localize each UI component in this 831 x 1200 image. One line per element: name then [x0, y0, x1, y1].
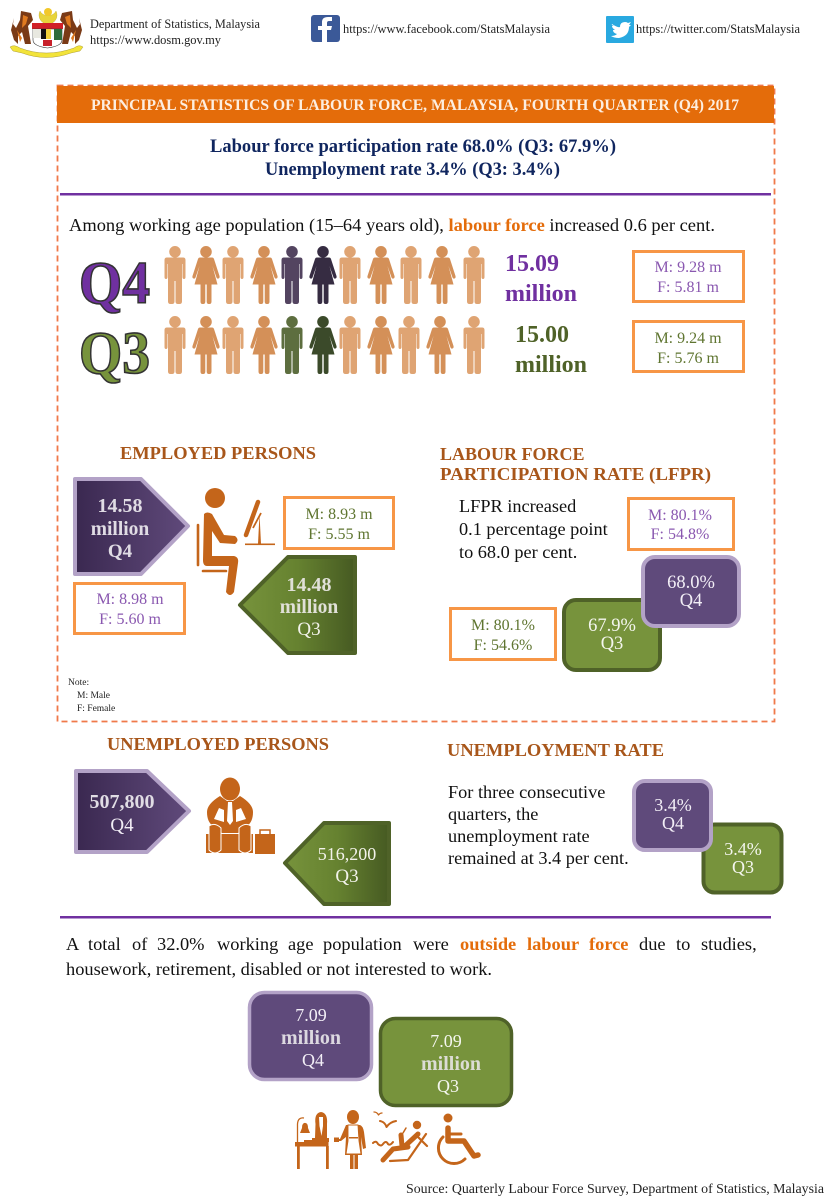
- arrow: employed Q4: 14.58: [98, 495, 142, 517]
- text: outside labour force: A: [66, 934, 80, 954]
- note: [68, 678, 115, 714]
- title banner: [57, 86, 774, 123]
- panel: main dashed frame: [58, 86, 774, 722]
- arrow: employed Q4: million: [91, 519, 149, 540]
- stat: Q3 labour force: million: [515, 352, 587, 378]
- arrow: employed Q3: million: [280, 597, 338, 618]
- text: LFPR statement: LFPR increased: [459, 496, 576, 516]
- header: department text: Department of Statistics, Malaysia: [90, 17, 260, 31]
- text: unemployment statement: [448, 782, 629, 868]
- icon: person at desk: [198, 488, 275, 595]
- badge: outside labour force Q3: 7.09: [430, 1031, 462, 1051]
- icon: wheelchair: [438, 1114, 478, 1164]
- stat: Q4 labour force: million: [505, 281, 577, 307]
- badge: LFPR Q3: Q3: [601, 634, 623, 654]
- text: outside labour force: force: [589, 934, 628, 954]
- callout: LFPR Q4 split: [628, 498, 734, 550]
- text: outside labour force: labour: [527, 934, 579, 954]
- stat: Q3 labour force: 15.00: [515, 322, 569, 348]
- text: outside labour force: housework, retirement, disabled or not interested to work.: [66, 959, 492, 979]
- text: outside labour force: of: [132, 934, 148, 954]
- header: department text: https://www.dosm.gov.my: [90, 33, 222, 47]
- arrow: unemployed Q3: 516,200: [318, 844, 376, 864]
- header: emblem of Malaysia: [10, 8, 83, 58]
- arrow: unemployed Q3: Q3: [335, 866, 359, 887]
- facebook link: https://www.facebook.com/StatsMalaysia: [343, 21, 550, 36]
- badge: outside labour force Q3: Q3: [437, 1076, 459, 1096]
- badge: unemployment rate Q3: 3.4%: [724, 839, 762, 859]
- arrow: unemployed Q3: [285, 823, 389, 904]
- text: outside labour force: working: [217, 934, 278, 954]
- arrow: employed Q4: [75, 479, 188, 574]
- stat: Q4 labour force: 15.09: [505, 251, 559, 277]
- badge: unemployment rate Q3: Q3: [732, 857, 754, 877]
- text: unemployment statement: quarters, the: [448, 804, 538, 824]
- callout: employed Q4 split: F: 5.60 m: [99, 611, 161, 628]
- icon: housewife with apron: [334, 1110, 366, 1169]
- text: outside labour force: 32.0%: [157, 934, 205, 954]
- twitter link: https://twitter.com/StatsMalaysia: [636, 21, 800, 36]
- text: unemployment statement: For three consecutive: [448, 782, 605, 802]
- heading: employed persons: EMPLOYED PERSONS: [120, 443, 316, 463]
- callout: employed Q4 split: M: 8.98 m: [96, 591, 164, 608]
- callout: Q3 gender split: F: 5.76 m: [657, 350, 719, 367]
- badge: outside labour force Q4: [250, 992, 372, 1080]
- callout: LFPR Q3 split: M: 80.1%: [471, 617, 535, 634]
- arrow: unemployed Q4: [76, 771, 189, 852]
- headline rates: [210, 137, 616, 180]
- callout: employed Q3 split: M: 8.93 m: [305, 506, 373, 523]
- source: Source: Quarterly Labour Force Survey, Department of Statistics, Malaysia: [406, 1182, 825, 1197]
- pictogram: Q4 people: [164, 246, 484, 304]
- text: outside labour force: [66, 934, 757, 979]
- callout: LFPR Q4 split: M: 80.1%: [648, 507, 712, 524]
- badge: outside labour force Q4: 7.09: [295, 1005, 327, 1025]
- callout: LFPR Q4 split: F: 54.8%: [651, 526, 709, 543]
- icon: retiree on lounge chair with birds: [373, 1112, 427, 1161]
- arrow: employed Q3: [240, 557, 355, 653]
- text: LFPR statement: [459, 496, 608, 562]
- badge: LFPR Q3: 67.9%: [588, 616, 636, 636]
- text: outside labour force: to: [676, 934, 690, 954]
- note: Note:: [68, 678, 89, 688]
- badge: outside labour force Q4: Q4: [302, 1050, 324, 1070]
- callout: Q4 gender split: [634, 252, 744, 302]
- text: unemployment statement: remained at 3.4 per cent.: [448, 848, 629, 868]
- heading: LFPR: [440, 444, 711, 485]
- callout: LFPR Q3 split: [450, 608, 556, 660]
- callout: employed Q3 split: F: 5.55 m: [308, 526, 370, 543]
- heading: LFPR: PARTICIPATION RATE (LFPR): [440, 464, 711, 485]
- label: Q4 large: Q4: [79, 250, 150, 316]
- icon: twitter: [606, 16, 634, 43]
- callout: Q4 gender split: F: 5.81 m: [657, 279, 719, 296]
- pictogram: Q3 people: [164, 316, 484, 374]
- note: F: Female: [77, 704, 115, 714]
- icon: unemployed man: [206, 778, 275, 854]
- heading: LFPR: LABOUR FORCE: [440, 444, 585, 464]
- text: outside labour force: total: [88, 934, 121, 954]
- label: Q3 large: Q3: [79, 320, 150, 386]
- arrow: employed Q4: Q4: [108, 541, 133, 562]
- headline rates: Labour force participation rate 68.0% (Q3: 67.9%): [210, 137, 616, 157]
- arrow: unemployed Q4: Q4: [110, 815, 134, 836]
- text: outside labour force: due: [639, 934, 666, 954]
- text: outside labour force: population: [323, 934, 402, 954]
- headline rates: Unemployment rate 3.4% (Q3: 3.4%): [265, 160, 560, 180]
- badge: unemployment rate Q4: [634, 781, 711, 850]
- arrow: employed Q3: 14.48: [286, 574, 332, 596]
- callout: Q3 gender split: M: 9.24 m: [654, 330, 722, 347]
- heading: unemployed persons: UNEMPLOYED PERSONS: [107, 734, 329, 754]
- badge: outside labour force Q3: [380, 1018, 512, 1106]
- icon: facebook: [311, 15, 340, 42]
- title banner: PRINCIPAL STATISTICS OF LABOUR FORCE, MALAYSIA, FOURTH QUARTER (Q4) 2017: [91, 97, 739, 114]
- icon: student at desk: [295, 1112, 329, 1169]
- badge: LFPR Q4: Q4: [680, 591, 702, 611]
- heading: unemployment rate: UNEMPLOYMENT RATE: [447, 740, 664, 760]
- callout: employed Q4 split: [74, 584, 184, 634]
- header: department text: [90, 17, 260, 47]
- badge: unemployment rate Q4: 3.4%: [654, 795, 692, 815]
- badge: LFPR Q4: [643, 557, 739, 626]
- badge: LFPR Q3: [564, 600, 660, 670]
- labour force statement: Among working age population (15–64 years old), labour force increased 0.6 per cent.: [69, 215, 715, 236]
- arrow: employed Q3: Q3: [297, 619, 321, 640]
- text: outside labour force: were: [413, 934, 449, 954]
- stat: Q4 labour force: [505, 251, 577, 307]
- badge: outside labour force Q4: million: [281, 1027, 341, 1049]
- note: M: Male: [77, 691, 110, 701]
- arrow: unemployed Q4: 507,800: [90, 791, 154, 813]
- callout: Q3 gender split: [634, 322, 744, 372]
- text: outside labour force: age: [288, 934, 314, 954]
- text: LFPR statement: 0.1 percentage point: [459, 519, 608, 539]
- text: unemployment statement: unemployment rate: [448, 826, 590, 846]
- callout: LFPR Q3 split: F: 54.6%: [474, 637, 532, 654]
- badge: LFPR Q4: 68.0%: [667, 573, 715, 593]
- callout: Q4 gender split: M: 9.28 m: [654, 259, 722, 276]
- badge: outside labour force Q3: million: [421, 1053, 481, 1075]
- badge: unemployment rate Q3: [704, 824, 782, 892]
- text: outside labour force: outside: [460, 934, 516, 954]
- badge: unemployment rate Q4: Q4: [662, 813, 684, 833]
- text: LFPR statement: to 68.0 per cent.: [459, 542, 577, 562]
- stat: Q3 labour force: [515, 322, 587, 378]
- text: outside labour force: studies,: [701, 934, 757, 954]
- callout: employed Q3 split: [284, 498, 394, 548]
